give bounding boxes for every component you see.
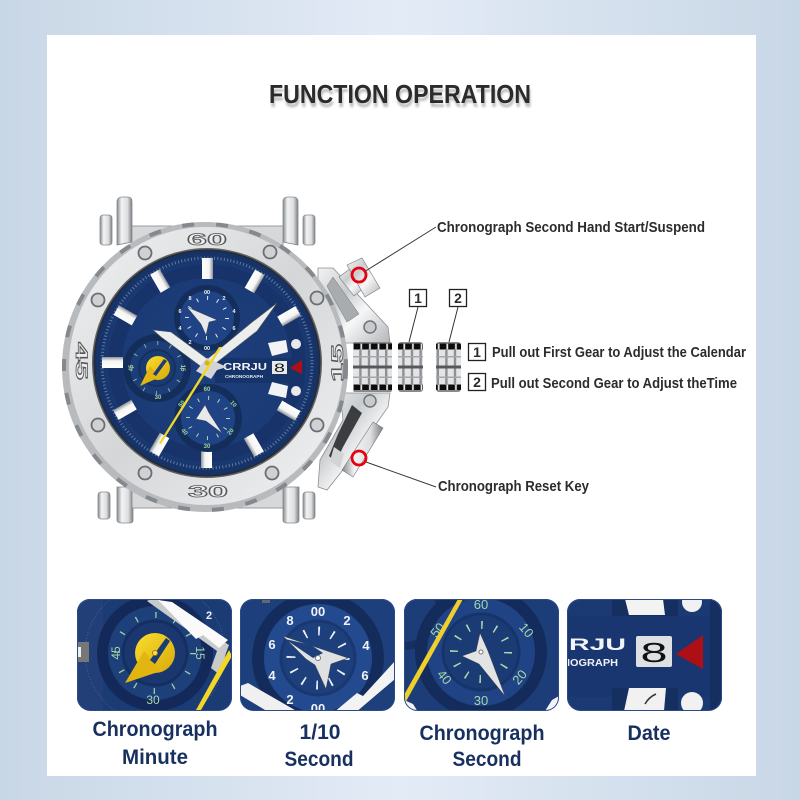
sub-dial: 1/10 second: 00 (204, 290, 210, 296)
sub-dial: chronograph second: 50 (178, 399, 187, 409)
bezel numerals: 45 (72, 342, 91, 380)
detail panel: date: RJU (569, 635, 626, 654)
sub-dial: chronograph minute: 45 (129, 364, 135, 371)
detail panel: 1/10 second: 4 (268, 668, 276, 683)
callout: start/suspend: Chronograph Second Hand Start/Suspend (437, 219, 705, 236)
gear position 2 (436, 290, 466, 392)
callout: start/suspend (352, 219, 705, 282)
dial (95, 251, 319, 475)
bezel numerals (72, 230, 347, 501)
bezel numerals: 15 (328, 344, 347, 382)
pushers (339, 258, 383, 477)
sub-dial: 1/10 second: 00 (204, 346, 210, 352)
instruction 2: 2 (473, 374, 481, 390)
sub-dial: 1/10 second: 8 (188, 296, 192, 302)
sub-dial: chronograph minute (123, 334, 191, 402)
date band: CRRJU (223, 362, 267, 373)
gear position 1: 1 (414, 290, 422, 306)
date band: 8 (274, 361, 286, 375)
detail panel: date (567, 592, 722, 714)
label: chronograph second: Second (452, 748, 522, 771)
detail panel: 1/10 second: 00 (311, 701, 325, 716)
detail panel: 1/10 second: 8 (286, 613, 294, 628)
detail panel: 1/10 second: 00 (311, 604, 325, 619)
title: FUNCTION OPERATION (270, 83, 532, 113)
detail panel: chronograph second (404, 599, 559, 711)
label: date: Date (628, 722, 670, 745)
sub-dial: 1/10 second: 6 (232, 326, 236, 332)
detail panel: chronograph second: 30 (474, 693, 488, 708)
gear position 2: 2 (454, 290, 462, 306)
label: 1/10 second: 1/10 (300, 721, 340, 744)
date band (215, 339, 302, 398)
detail panel: 1/10 second: 4 (362, 638, 370, 653)
detail panel: chronograph minute: 15 (193, 646, 207, 660)
detail panel: chronograph minute: 45 (109, 646, 123, 660)
sub-dial: chronograph second: 30 (204, 444, 211, 450)
instruction 1: Pull out First Gear to Adjust the Calendar (492, 344, 746, 361)
detail panel: chronograph second: 50 (427, 620, 448, 640)
sub-dial: 1/10 second: 2 (188, 340, 192, 346)
sub-dial: chronograph second: 10 (228, 400, 238, 409)
label: chronograph second (420, 722, 544, 771)
sub-dial: chronograph second: 20 (227, 427, 236, 437)
sub-dial: 1/10 second: 4 (178, 326, 182, 332)
label: chronograph minute: Chronograph (92, 718, 218, 741)
detail panel: 1/10 second (240, 599, 395, 711)
detail panel: date: 8 (640, 637, 668, 668)
detail panel: date: IOGRAPH (567, 658, 618, 669)
detail panel: 1/10 second: 6 (361, 668, 369, 683)
label: 1/10 second: Second (284, 748, 354, 771)
detail panel: chronograph minute: 30 (146, 693, 160, 707)
sub-dial: 1/10 second (174, 285, 240, 352)
instruction 1: 1 (473, 344, 481, 360)
sub-dial: chronograph second: 40 (179, 428, 189, 437)
sub-dial: 1/10 second: 4 (232, 309, 236, 315)
sub-dial: chronograph minute: 30 (155, 395, 162, 401)
detail panel: 1/10 second: 6 (268, 637, 276, 652)
right case guard (318, 268, 390, 490)
instruction 2: Pull out Second Gear to Adjust theTime (491, 375, 737, 392)
detail panel: chronograph second: 10 (516, 620, 537, 640)
hour indices (102, 258, 301, 468)
watch illustration (62, 197, 392, 523)
gear position 1 (398, 290, 426, 392)
hands (153, 303, 277, 444)
detail panel: 1/10 second: 2 (343, 613, 351, 628)
detail panel: chronograph minute (77, 599, 232, 711)
label: chronograph second: Chronograph (420, 722, 544, 745)
detail panel: 1/10 second: 2 (286, 692, 294, 707)
sub-dial: chronograph second: 60 (204, 387, 211, 393)
bezel (62, 222, 348, 512)
label: chronograph minute: Minute (122, 746, 188, 769)
bezel screws (92, 246, 324, 480)
crown (353, 342, 392, 392)
bezel numerals: 60 (187, 230, 227, 249)
sub-dial: 1/10 second: 6 (178, 309, 182, 315)
label: chronograph minute (92, 718, 218, 769)
title: FUNCTION OPERATION (269, 79, 531, 109)
lugs and case body (98, 197, 315, 523)
sub-dial: chronograph second (174, 384, 242, 452)
date band: CHRONOGRAPH (225, 374, 263, 379)
callout: reset key: Chronograph Reset Key (438, 478, 590, 495)
callout: reset key (352, 451, 590, 495)
detail panel: chronograph minute: 2 (206, 610, 212, 622)
detail panel: chronograph second: 20 (509, 667, 530, 687)
label: 1/10 second (284, 721, 354, 771)
detail panel: chronograph second: 40 (434, 667, 455, 687)
detail panel: chronograph second: 60 (474, 597, 488, 612)
bezel numerals: 30 (188, 482, 228, 501)
sub-dial: 1/10 second: 2 (222, 296, 226, 302)
sub-dial: chronograph minute: 15 (179, 365, 185, 372)
